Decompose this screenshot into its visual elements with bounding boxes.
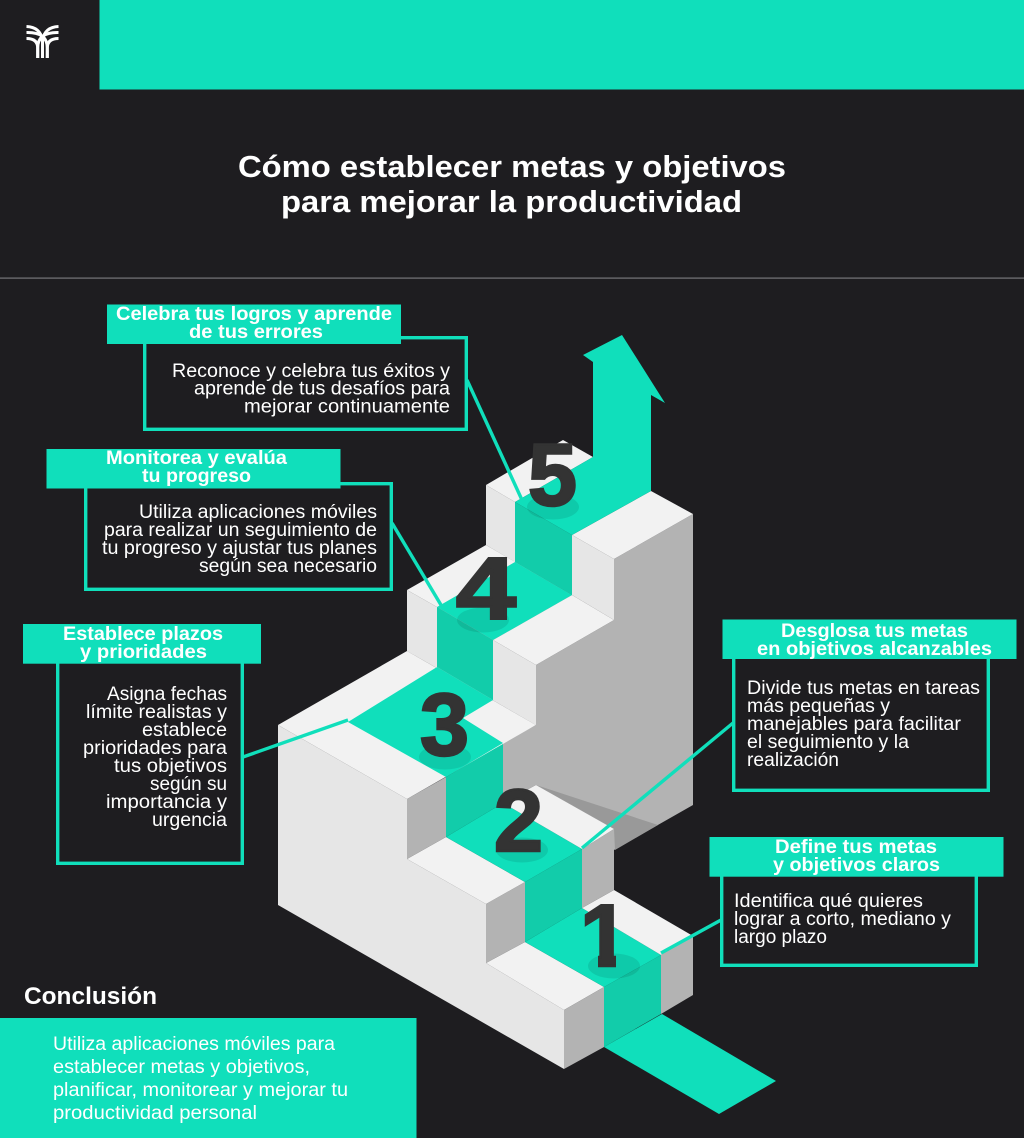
callout 1: Define: lograr a corto, mediano y	[734, 909, 952, 930]
conclusion panel	[0, 1018, 416, 1138]
staircase back wall	[503, 514, 693, 850]
callout 3: Establece: según su	[150, 774, 227, 795]
callout 3: Establece: tus objetivos	[114, 756, 227, 777]
callout 3: Establece: y prioridades	[80, 642, 207, 663]
logo icon	[26, 26, 58, 58]
callout 4: Monitorea: Monitorea y evalúa	[106, 448, 287, 469]
connector lines	[243, 380, 733, 953]
step 4	[407, 545, 614, 725]
callout 1: Define	[710, 837, 1004, 965]
title	[238, 149, 786, 219]
callout 2: Desglosa: Desglosa tus metas	[781, 621, 968, 642]
number 5: 5	[528, 425, 577, 524]
staircase front face	[278, 725, 564, 1069]
callout 4: Monitorea: Utiliza aplicaciones móviles	[139, 502, 377, 523]
callout 3: Establece: establece	[142, 720, 227, 741]
number 3: 3	[420, 675, 469, 774]
rising arrow	[515, 335, 665, 535]
conclusion heading: Conclusión	[24, 983, 157, 1010]
step 1	[486, 890, 776, 1114]
callout 3: Establece: Asigna fechas	[107, 684, 227, 705]
callout 5: Celebra: de tus errores	[189, 322, 323, 343]
callout 5: Celebra: mejorar continuamente	[244, 396, 450, 418]
cast shadow	[536, 785, 658, 850]
conclusion panel: establecer metas y objetivos,	[53, 1057, 310, 1078]
callout 1: Define: y objetivos claros	[773, 855, 940, 876]
number 1: 1	[580, 886, 629, 985]
callout 1: Define: Define tus metas	[775, 837, 937, 858]
callout 4: Monitorea: tu progreso y ajustar tus planes	[102, 538, 377, 559]
title: Cómo establecer metas y objetivos	[238, 149, 786, 184]
callout 5: Celebra: aprende de tus desafíos para	[194, 378, 450, 400]
callout 2: Desglosa: el seguimiento y la	[747, 732, 909, 753]
title: para mejorar la productividad	[281, 184, 742, 219]
callout 3: Establece: límite realistas y	[86, 702, 228, 723]
callout 4: Monitorea: tu progreso	[142, 466, 251, 487]
conclusion panel: productividad personal	[53, 1103, 257, 1124]
callout 2: Desglosa: Divide tus metas en tareas	[747, 678, 980, 699]
callout 3: Establece: urgencia	[152, 810, 227, 831]
callout 3: Establece: Establece plazos	[63, 624, 223, 645]
callout 4: Monitorea	[46, 448, 391, 589]
callout 5: Celebra: Reconoce y celebra tus éxitos y	[172, 361, 451, 382]
callout 5: Celebra	[107, 304, 466, 429]
callout 2: Desglosa	[722, 620, 1016, 790]
callout 2: Desglosa: realización	[747, 750, 839, 771]
step 3 landing	[278, 600, 536, 859]
callout 2: Desglosa: manejables para facilitar	[747, 714, 962, 735]
callout 3: Establece	[23, 624, 261, 863]
top banner bar	[100, 0, 1024, 90]
callout 4: Monitorea: según sea necesario	[199, 556, 377, 577]
number 2: 2	[494, 771, 543, 870]
isometric staircase with arrow	[278, 335, 776, 1114]
conclusion panel: Utiliza aplicaciones móviles para	[53, 1034, 335, 1055]
callout 1: Define: Identifica qué quieres	[734, 891, 923, 912]
step 5	[486, 440, 693, 620]
callout 1: Define: largo plazo	[734, 927, 827, 948]
callout 3: Establece: importancia y	[106, 792, 228, 813]
callout 5: Celebra: Celebra tus logros y aprende	[116, 304, 392, 325]
callout 2: Desglosa: en objetivos alcanzables	[757, 639, 992, 660]
number shadows	[419, 494, 640, 978]
step numbers	[419, 425, 640, 985]
callout 3: Establece: prioridades para	[83, 738, 227, 759]
callout 4: Monitorea: para realizar un seguimiento de	[104, 520, 377, 541]
number 4: 4	[456, 539, 516, 638]
step 2	[407, 785, 614, 963]
callout 2: Desglosa: más pequeñas y	[747, 696, 891, 717]
conclusion panel: planificar, monitorear y mejorar tu	[53, 1080, 348, 1101]
